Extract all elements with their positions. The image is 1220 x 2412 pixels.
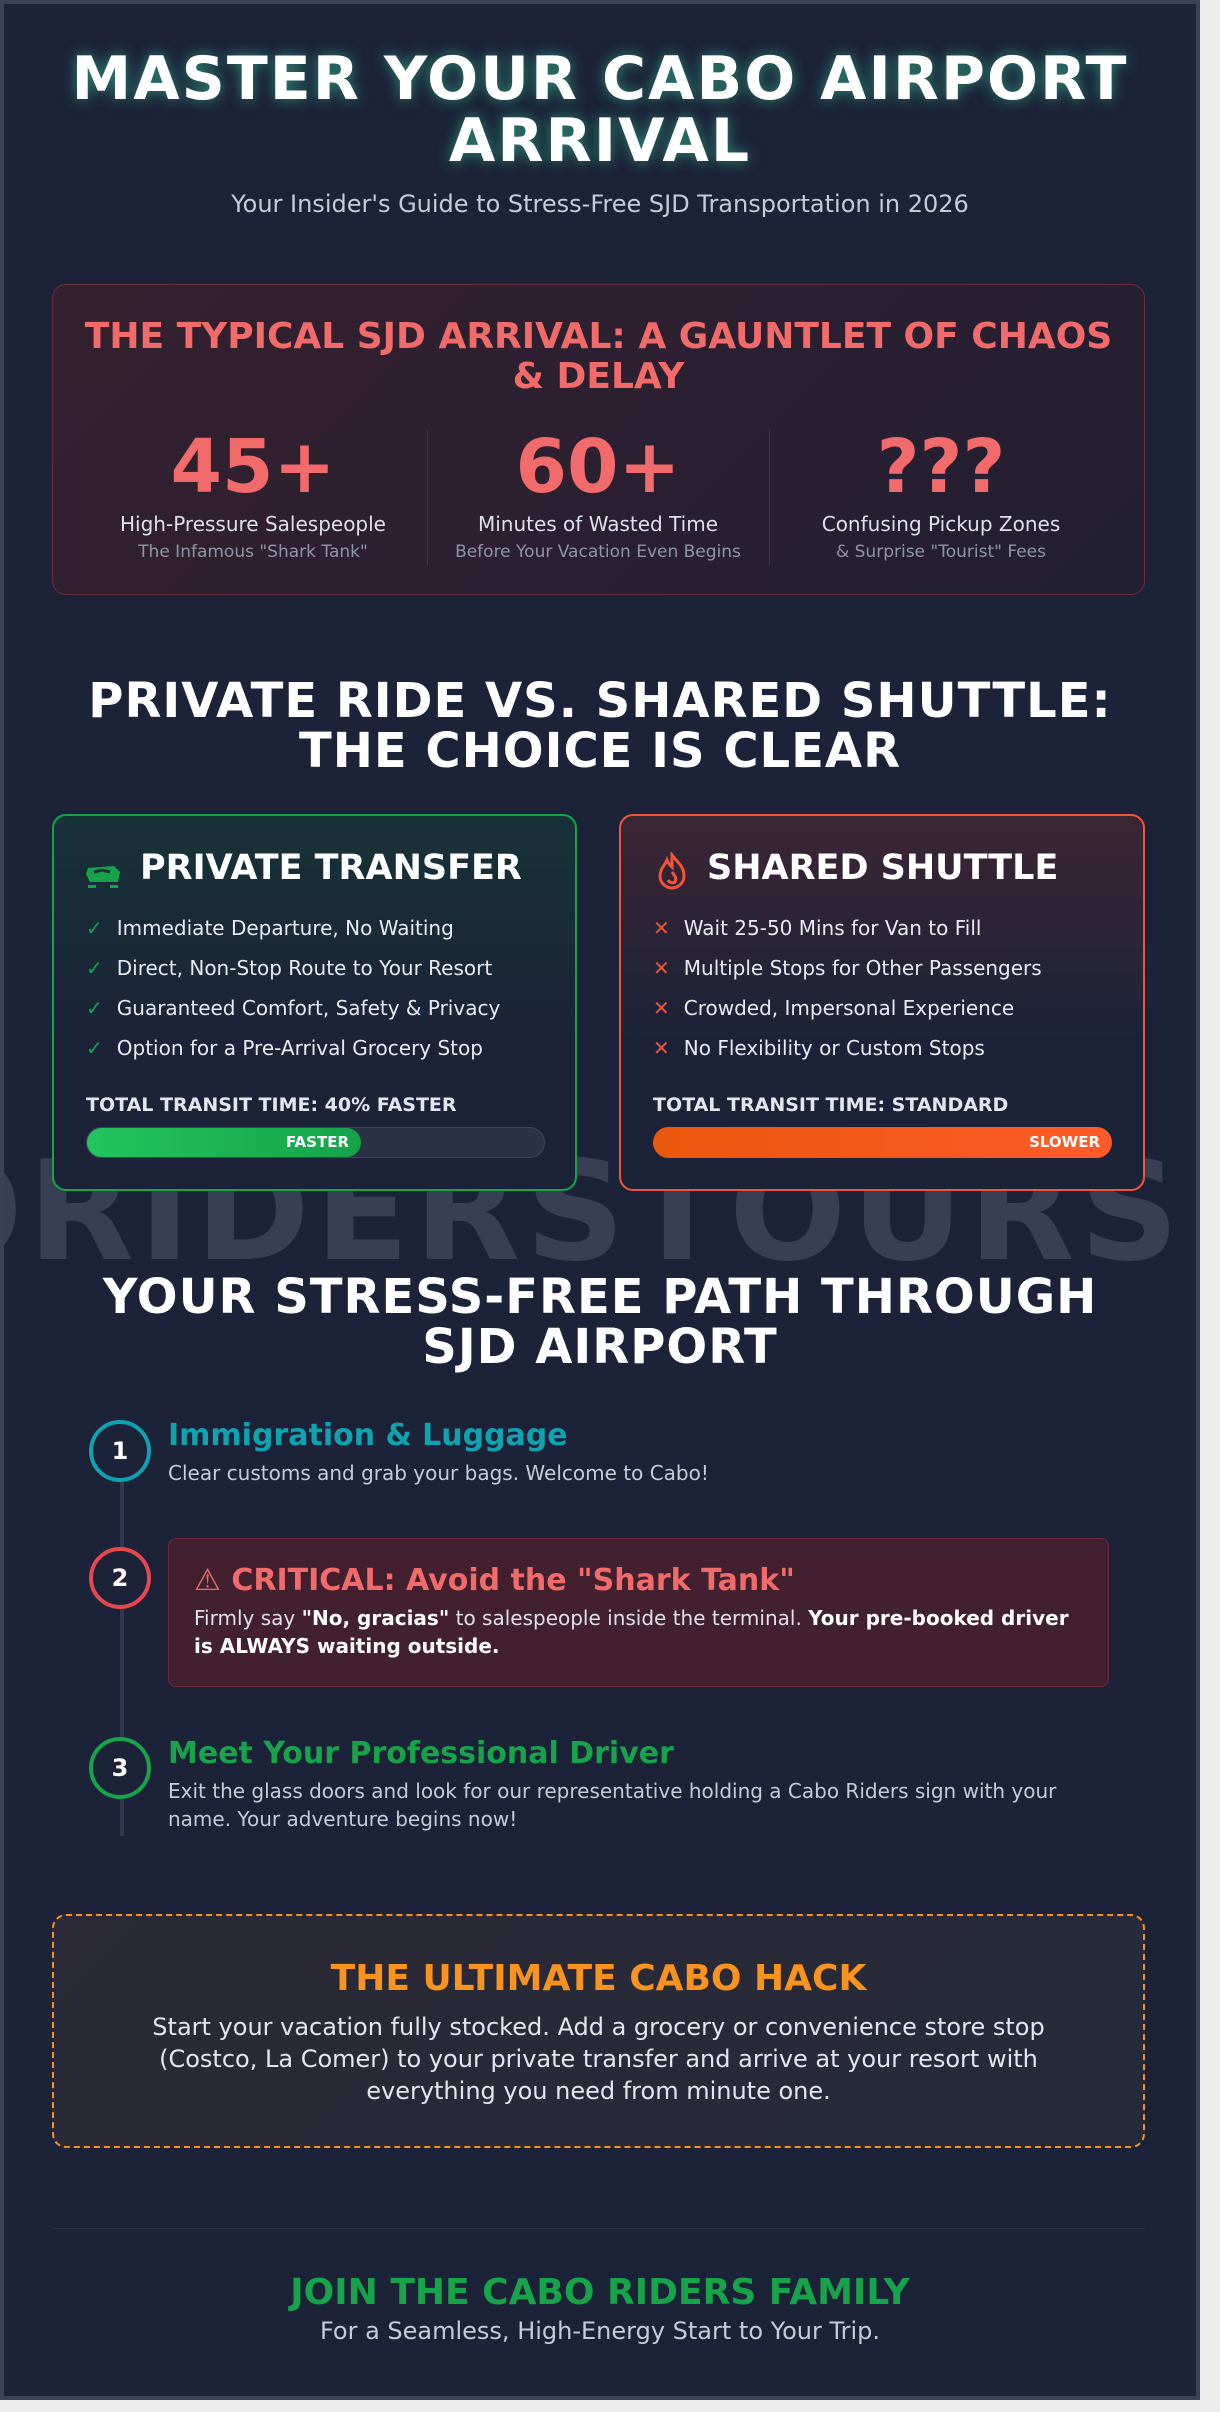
stat: 60+: Minutes of Wasted Time (478, 512, 718, 536)
circle 1: 1 (112, 1437, 128, 1465)
icon: car (86, 866, 120, 888)
icon: flame (658, 852, 686, 890)
panel: shared shuttle (619, 814, 1145, 1191)
list: drawbacks: ✕ Wait 25-50 Mins for Van to Fill (653, 916, 981, 940)
footer: JOIN THE CABO RIDERS FAMILY (290, 2272, 910, 2313)
stat: 60+ (455, 424, 741, 562)
heading: private transfer: PRIVATE TRANSFER (140, 848, 522, 888)
list: drawbacks: ✕ Multiple Stops for Other Passengers (653, 956, 1042, 980)
footer: For a Seamless, High-Energy Start to Your Trip. (320, 2317, 880, 2345)
list: drawbacks (653, 916, 1042, 1060)
step 3 text: Meet Your Professional Driver (168, 1736, 674, 1771)
stat: ???: & Surprise "Tourist" Fees (836, 542, 1046, 562)
chaos heading (84, 316, 1112, 397)
transit label: TOTAL TRANSIT TIME: 40% FASTER (86, 1094, 457, 1116)
timeline line (120, 1450, 124, 1836)
title: ARRIVAL (449, 106, 751, 176)
path heading: SJD AIRPORT (422, 1319, 778, 1375)
transit label: TOTAL TRANSIT TIME: STANDARD (653, 1094, 1008, 1116)
step 3 (89, 1736, 1056, 1831)
callout: shark tank: Firmly say "No, gracias" to salespeople inside the terminal. Your pre-booked driver is ALWAYS waiting outside. (194, 1606, 1069, 1658)
list: drawbacks: ✕ No Flexibility or Custom Stops (653, 1036, 985, 1060)
circle 3 (89, 1737, 151, 1799)
bar: faster (86, 1127, 545, 1158)
bar: faster: FASTER (286, 1133, 349, 1151)
path heading (102, 1269, 1097, 1375)
comparison heading: PRIVATE RIDE VS. SHARED SHUTTLE: (88, 673, 1112, 729)
path heading: YOUR STRESS-FREE PATH THROUGH (103, 1269, 1097, 1325)
heading: shared shuttle: SHARED SHUTTLE (707, 848, 1058, 888)
stat: ???: ??? (877, 424, 1005, 510)
callout: shark tank: ⚠ CRITICAL: Avoid the "Shark Tank" (194, 1563, 795, 1598)
step 1 text (168, 1418, 709, 1485)
stat: ??? (822, 424, 1060, 562)
stat: 45+: The Infamous "Shark Tank" (138, 542, 368, 562)
panel: private transfer (52, 814, 577, 1191)
step 1 text: Immigration & Luggage (168, 1418, 568, 1453)
callout: ultimate hack: THE ULTIMATE CABO HACK (331, 1958, 866, 1999)
callout: ultimate hack (52, 1914, 1145, 2148)
stat: 45+: 45+ (170, 424, 335, 510)
step 3 text (168, 1736, 1056, 1831)
bar: slower: SLOWER (1029, 1133, 1100, 1151)
callout: shark tank (168, 1538, 1109, 1687)
comparison heading (88, 673, 1112, 779)
chaos heading: & DELAY (513, 356, 684, 397)
footer (288, 2272, 910, 2345)
stat: ???: Confusing Pickup Zones (822, 512, 1060, 536)
step 1 text: Clear customs and grab your bags. Welcome to Cabo! (168, 1461, 709, 1485)
panel: chaos stats (52, 284, 1145, 595)
subtitle: Your Insider's Guide to Stress-Free SJD Transportation in 2026 (231, 190, 969, 218)
list: benefits: ✓ Direct, Non-Stop Route to Your Resort (86, 956, 492, 980)
step 1 (89, 1418, 709, 1485)
list: benefits: ✓ Guaranteed Comfort, Safety & Privacy (86, 996, 500, 1020)
list: benefits: ✓ Immediate Departure, No Waiting (86, 916, 454, 940)
callout: ultimate hack: Start your vacation fully stocked. Add a grocery or convenience store stop (Costco, La Comer) to your private transfer and arrive at your resort with everything you need from minute one. (152, 2013, 1045, 2105)
chaos heading: THE TYPICAL SJD ARRIVAL: A GAUNTLET OF CHAOS (85, 316, 1112, 357)
stat: 45+: High-Pressure Salespeople (120, 512, 386, 536)
stat: 60+: Before Your Vacation Even Begins (455, 542, 741, 562)
circle 2 (89, 1547, 151, 1609)
title (68, 44, 1132, 176)
step 2 (89, 1538, 1109, 1687)
list: benefits: ✓ Option for a Pre-Arrival Grocery Stop (86, 1036, 483, 1060)
stat: 60+: 60+ (516, 424, 680, 510)
comparison heading: THE CHOICE IS CLEAR (299, 723, 901, 779)
title: MASTER YOUR CABO AIRPORT (72, 44, 1128, 114)
stat: 45+ (120, 424, 386, 562)
circle 1 (89, 1420, 151, 1482)
list: drawbacks: ✕ Crowded, Impersonal Experience (653, 996, 1014, 1020)
step 3 text: Exit the glass doors and look for our representative holding a Cabo Riders sign with your name. Your adventure begins now! (168, 1779, 1056, 1831)
list: benefits (86, 916, 500, 1060)
circle 3: 3 (112, 1754, 128, 1782)
bar: slower (653, 1127, 1112, 1158)
circle 2: 2 (112, 1564, 128, 1592)
